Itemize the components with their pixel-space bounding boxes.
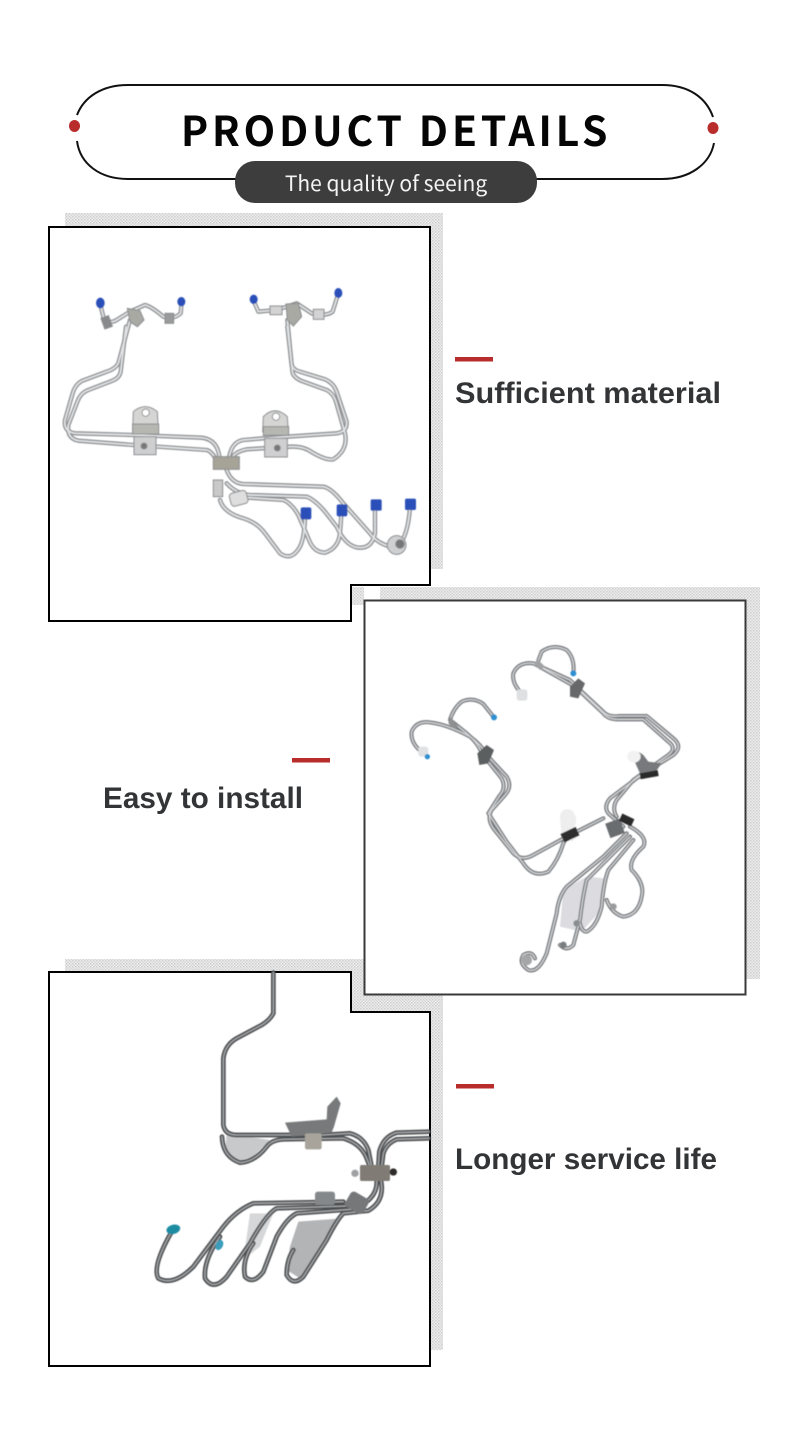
feature: sufficient material bbox=[455, 357, 721, 410]
panel: easy to install photo bbox=[364, 600, 746, 994]
panel: longer service life photo bbox=[49, 972, 430, 1366]
panel backdrop: dotted texture bbox=[65, 213, 760, 1350]
clamps and fittings bbox=[285, 1097, 397, 1216]
red accent bar bbox=[292, 758, 330, 762]
red accent bar bbox=[456, 1084, 494, 1088]
subtitle: The quality of seeing bbox=[285, 168, 487, 198]
clamps bbox=[418, 658, 662, 965]
blue tips bbox=[425, 670, 576, 759]
heading: PRODUCT DETAILS bbox=[181, 98, 611, 158]
feature: easy to install bbox=[103, 758, 330, 815]
product photo: fuel line set, front view bbox=[65, 288, 416, 556]
label: Easy to install bbox=[103, 782, 303, 815]
product photo: fuel line set, angled view bbox=[411, 647, 678, 970]
red accent bar bbox=[455, 357, 493, 362]
title banner bbox=[69, 85, 718, 203]
teal tips bbox=[165, 1223, 181, 1236]
feature: longer service life bbox=[455, 1084, 717, 1176]
subtitle pill bbox=[235, 161, 537, 203]
right red dot bbox=[708, 122, 718, 134]
label: Longer service life bbox=[455, 1143, 717, 1176]
left red dot bbox=[69, 120, 80, 132]
product photo: fuel line set, close view bbox=[157, 973, 429, 1285]
label: Sufficient material bbox=[455, 377, 721, 410]
banner outline bbox=[77, 85, 714, 179]
brackets and clamps bbox=[101, 303, 406, 554]
panel: sufficient material photo bbox=[49, 227, 430, 621]
blue caps bbox=[96, 288, 416, 519]
